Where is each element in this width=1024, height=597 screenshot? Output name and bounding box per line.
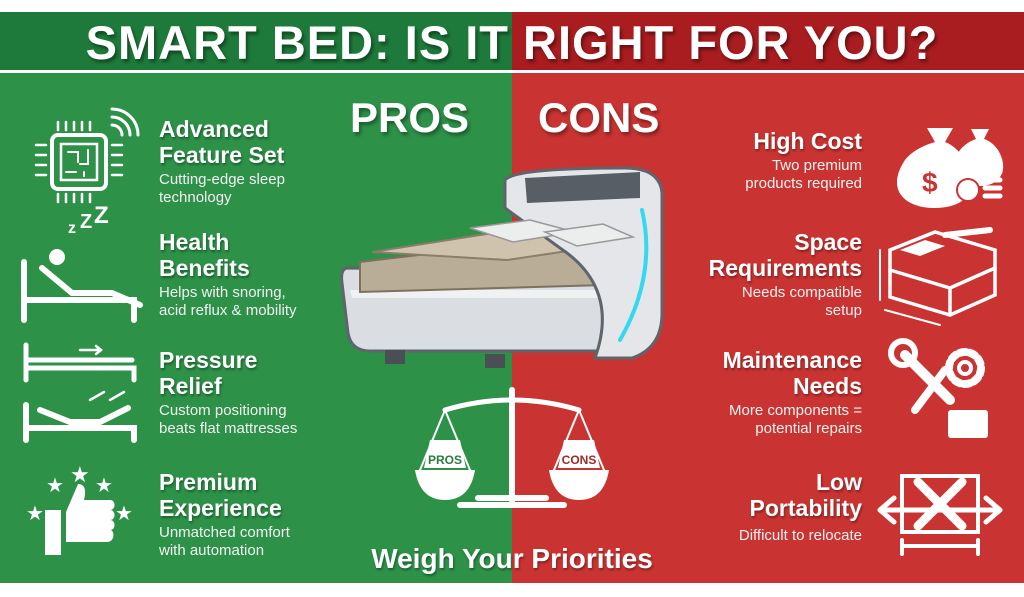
icon: sleeping person adjustable bed: Z [94,202,109,229]
pro 2 text [159,229,297,319]
illustration: scale: PROS [428,453,462,467]
con 2 text: setup [825,302,862,319]
con 3 text [723,347,864,437]
icon: wrench and gear [891,341,988,438]
icon: chip [36,109,138,202]
icon: thumbs up stars: ★ [95,475,113,497]
pro 4 text [159,469,290,559]
pro 3 text: Relief [159,373,222,399]
con 3 text: More components = [729,402,862,419]
icon: thumbs up stars: ★ [115,503,133,525]
background green [0,73,512,583]
pro 1 text: Advanced [159,116,269,142]
pro 4 text: Unmatched comfort [159,524,290,541]
pro 3 text: Custom positioning [159,402,287,419]
icon: low portability bed arrows [880,476,1000,554]
icon: bed with measuring [880,230,995,325]
con 4 text: Portability [750,495,862,521]
caption: weigh your priorities: Weigh Your Priorities [371,543,653,574]
pro 1 text: Feature Set [159,142,284,168]
con 2 text: Space [794,229,862,255]
con 2 text [709,229,864,319]
pro 4 text: Experience [159,495,282,521]
con 2 text: Needs compatible [742,284,862,301]
heading CONS: CONS [538,94,659,141]
pro 1 text: technology [159,189,232,206]
icon: thumbs up stars: ★ [70,462,90,487]
con 2 text: Requirements [709,255,862,281]
con 4 text [739,469,864,544]
pro 3 text [159,347,297,437]
pro 4 text: with automation [159,542,264,559]
con 1 text [745,128,864,192]
icon: sleeping person adjustable bed: Z [80,211,92,233]
pro 1 text: Cutting-edge sleep [159,171,285,188]
con 1 text: products required [745,175,862,192]
con 4 text: Difficult to relocate [739,527,862,544]
icon: money bags: $ [922,167,938,198]
icon: thumbs up stars: ★ [46,475,64,497]
heading PROS: PROS [350,94,469,141]
con 3 text: potential repairs [755,420,862,437]
icon: sleeping person adjustable bed [24,202,140,320]
pro 2 text: acid reflux & mobility [159,302,297,319]
title: SMART BED: IS IT RIGHT FOR YOU? [86,16,938,69]
icon: money bags [897,128,1003,208]
con 3 text: Maintenance [723,347,862,373]
con 3 text: Needs [793,373,862,399]
illustration: smart bed [342,168,662,368]
con 4 text: Low [816,469,862,495]
pro 2 text: Health [159,229,229,255]
icon: sleeping person adjustable bed: z [68,220,76,237]
con 1 text: High Cost [753,128,862,154]
pro 4 text: Premium [159,469,257,495]
icon: thumbs up stars [26,462,133,555]
pro 2 text: Helps with snoring, [159,284,286,301]
pro 2 text: Benefits [159,255,250,281]
pro 3 text: beats flat mattresses [159,420,297,437]
con 1 text: Two premium [772,157,862,174]
pro 3 text: Pressure [159,347,257,373]
illustration: scale [415,390,609,505]
icon: thumbs up stars: ★ [26,503,44,525]
title bar [0,12,1024,70]
icon: pressure relief beds [26,345,134,440]
background red [512,73,1024,583]
illustration: scale: CONS [562,453,596,467]
pro 1 text [159,116,286,206]
